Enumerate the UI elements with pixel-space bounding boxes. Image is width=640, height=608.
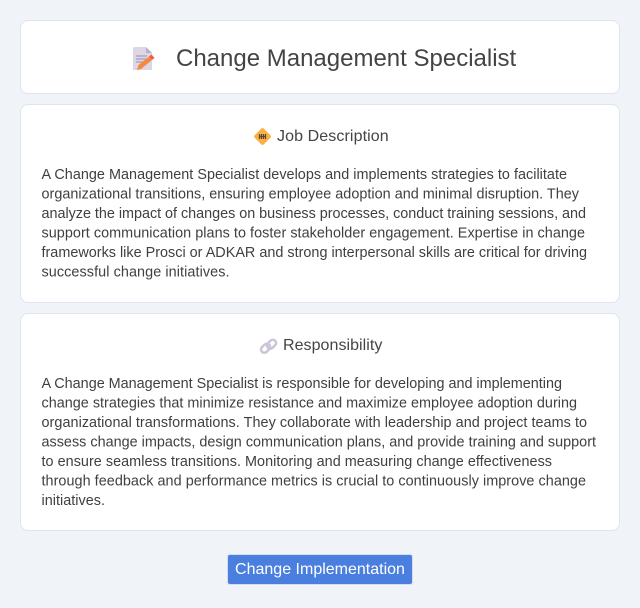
button: change implementation: Change Implementation — [235, 561, 405, 578]
panel: responsibility — [20, 313, 620, 531]
title: Change Management Specialist — [176, 45, 516, 72]
job description text: organizational transitions, ensuring employee adoption and minimal disruption. They — [42, 186, 580, 202]
responsibility text: initiatives. — [42, 493, 105, 509]
icon: diamond road sign — [254, 128, 271, 145]
responsibility text: through feedback and performance metrics is crucial to continuously improve change — [42, 474, 586, 490]
job description text: successful change initiatives. — [42, 264, 230, 280]
responsibility text: assess change impacts, design communication plans, and provide training and support — [42, 434, 596, 450]
job description text: A Change Management Specialist develops and implements strategies to facilitate — [42, 167, 567, 183]
job description text — [42, 167, 587, 280]
responsibility text — [42, 376, 596, 509]
responsibility text: organizational transformations. They collaborate with leadership and project teams to — [42, 415, 587, 431]
job description text: frameworks like Prosci or ADKAR and strong interpersonal skills are critical for driving — [42, 245, 587, 261]
panel: job description — [20, 104, 620, 303]
icon: document with pencil — [133, 47, 154, 70]
responsibility text: A Change Management Specialist is responsible for developing and implementing — [42, 376, 562, 392]
responsibility text: to ensure seamless transitions. Monitoring and measuring change effectiveness — [42, 454, 552, 470]
job description text: analyze the impact of changes on business processes, conduct training sessions, and — [42, 206, 586, 222]
panel: title card — [20, 20, 620, 94]
heading: responsibility: Responsibility — [283, 337, 382, 354]
responsibility text: change strategies that minimize resistance and maximize employee adoption during — [42, 396, 577, 412]
icon: chain link — [260, 338, 278, 354]
button: change implementation — [227, 554, 413, 585]
job description text: support communication plans to foster stakeholder engagement. Expertise in change — [42, 226, 585, 242]
heading: job description: Job Description — [277, 128, 389, 145]
